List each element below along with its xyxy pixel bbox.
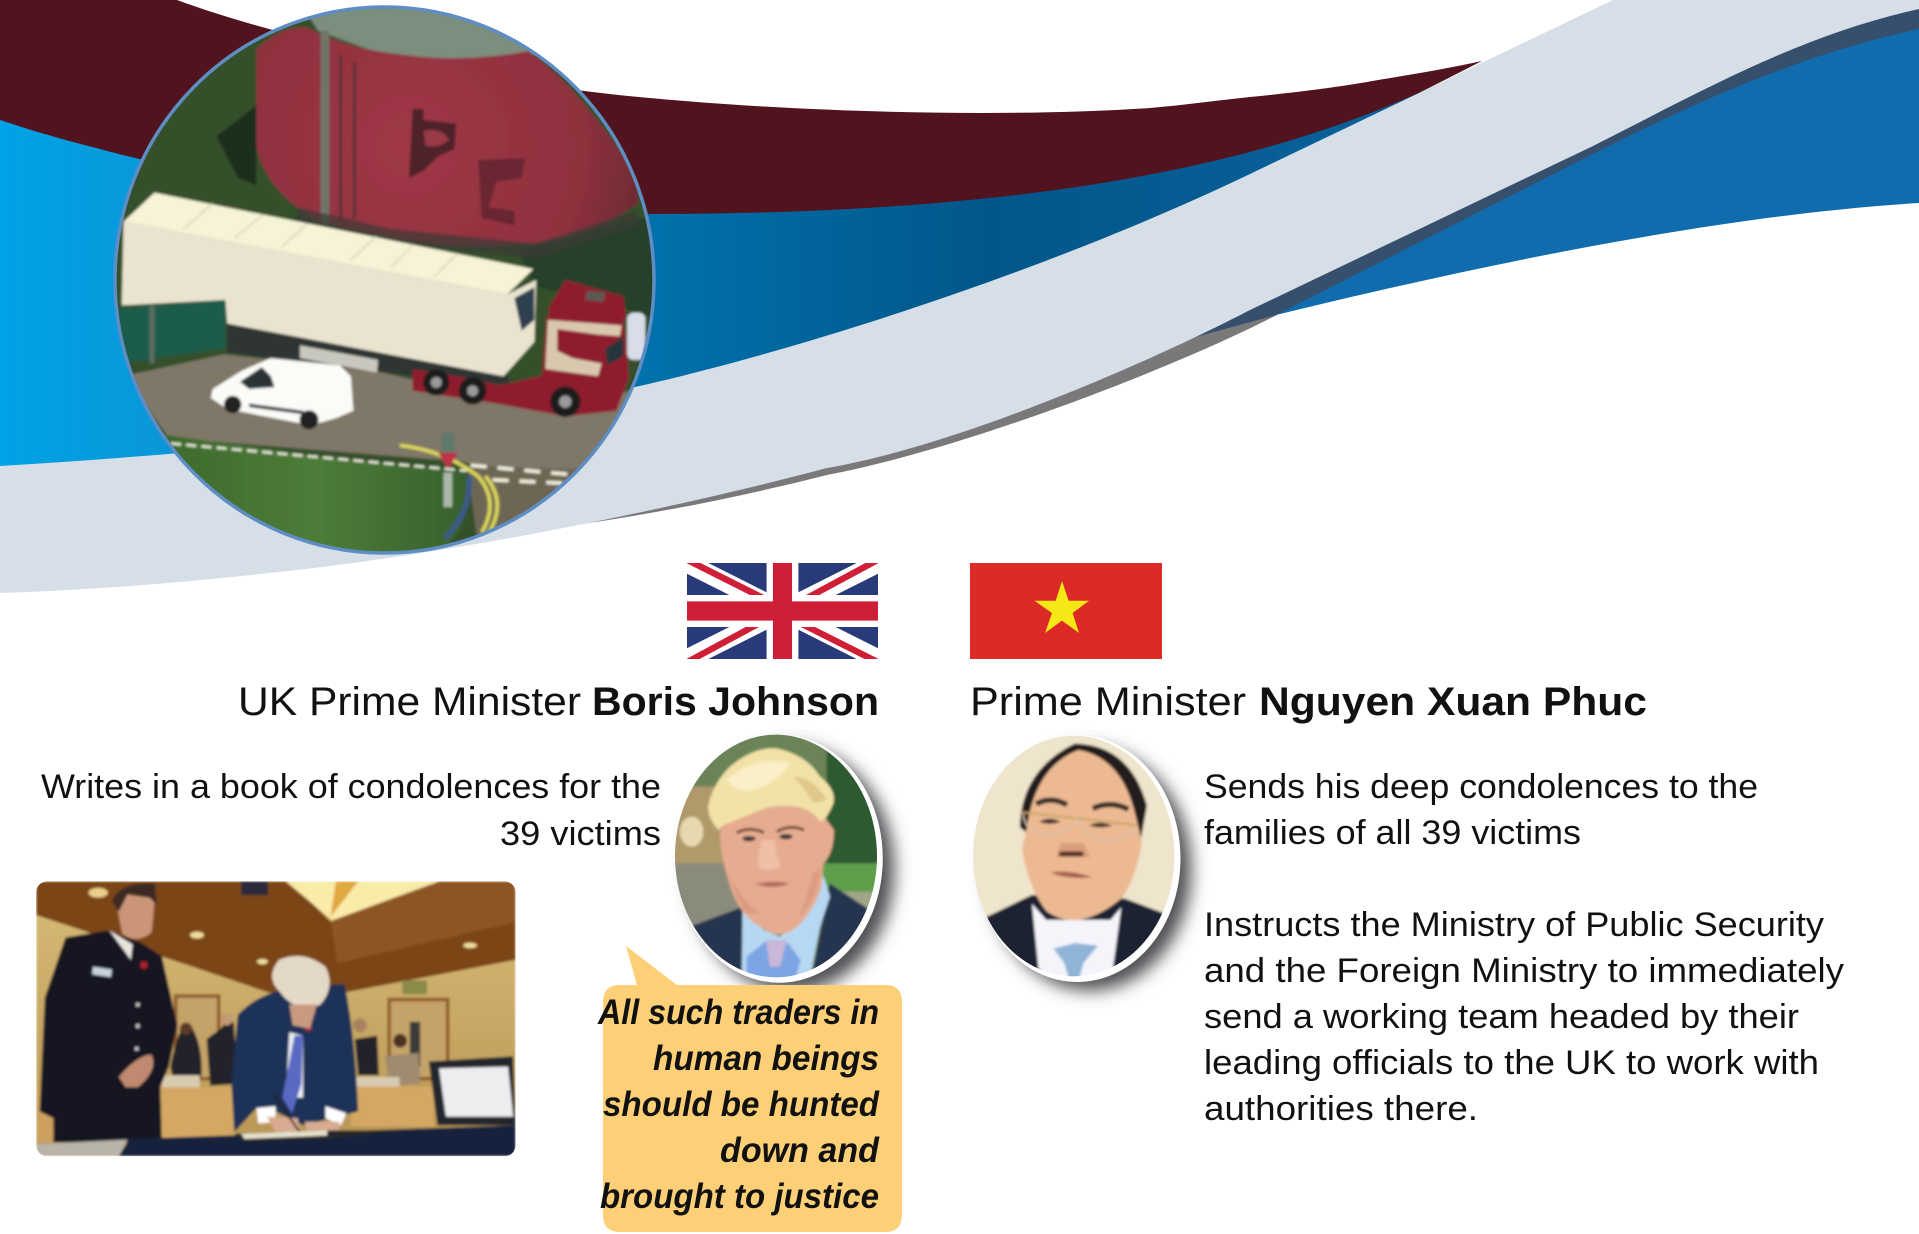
speech bubble: Johnson quote (597, 946, 902, 1232)
heading: Prime Minister Nguyen Xuan Phuc: Prime Minister (970, 680, 1246, 724)
heading: Prime Minister Nguyen Xuan Phuc: Nguyen Xuan Phuc (1259, 680, 1647, 724)
heading: UK Prime Minister Boris Johnson (238, 680, 879, 724)
text: Johnson condolences (41, 768, 661, 853)
text: Phuc actions: Sends his deep condolences to the (1204, 768, 1758, 806)
background waves (0, 0, 1919, 593)
speech bubble: Johnson quote: should be hunted (603, 1085, 880, 1124)
text: Johnson condolences: 39 victims (500, 815, 661, 853)
text: Phuc actions: authorities there. (1204, 1090, 1478, 1128)
text: Phuc actions: send a working team headed by their (1204, 998, 1799, 1036)
heading: Prime Minister Nguyen Xuan Phuc (970, 680, 1647, 724)
text: Phuc actions: families of all 39 victims (1204, 814, 1581, 852)
flag: United Kingdom (687, 560, 878, 662)
heading: UK Prime Minister Boris Johnson: Boris Johnson (592, 680, 879, 724)
heading: UK Prime Minister Boris Johnson: UK Prime Minister (238, 680, 581, 724)
portrait: Boris Johnson (670, 730, 894, 992)
speech bubble: Johnson quote: All such traders in (597, 993, 879, 1032)
text: Phuc actions (1204, 768, 1844, 1128)
text: Phuc actions: and the Foreign Ministry to immediately (1204, 952, 1844, 990)
speech bubble: Johnson quote: human beings (653, 1039, 879, 1078)
text: Phuc actions: Instructs the Ministry of Public Security (1204, 906, 1824, 944)
text: Johnson condolences: Writes in a book of condolences for the (41, 768, 661, 806)
speech bubble: Johnson quote: brought to justice (600, 1177, 879, 1216)
circular photo: truck at the scene (100, 0, 670, 570)
flag: Vietnam (970, 563, 1162, 659)
text: Phuc actions: leading officials to the UK to work with (1204, 1044, 1819, 1082)
portrait: Nguyen Xuan Phuc (968, 731, 1191, 991)
photo: Johnson signing book of condolences (36, 881, 516, 1156)
speech bubble: Johnson quote: down and (720, 1131, 880, 1170)
